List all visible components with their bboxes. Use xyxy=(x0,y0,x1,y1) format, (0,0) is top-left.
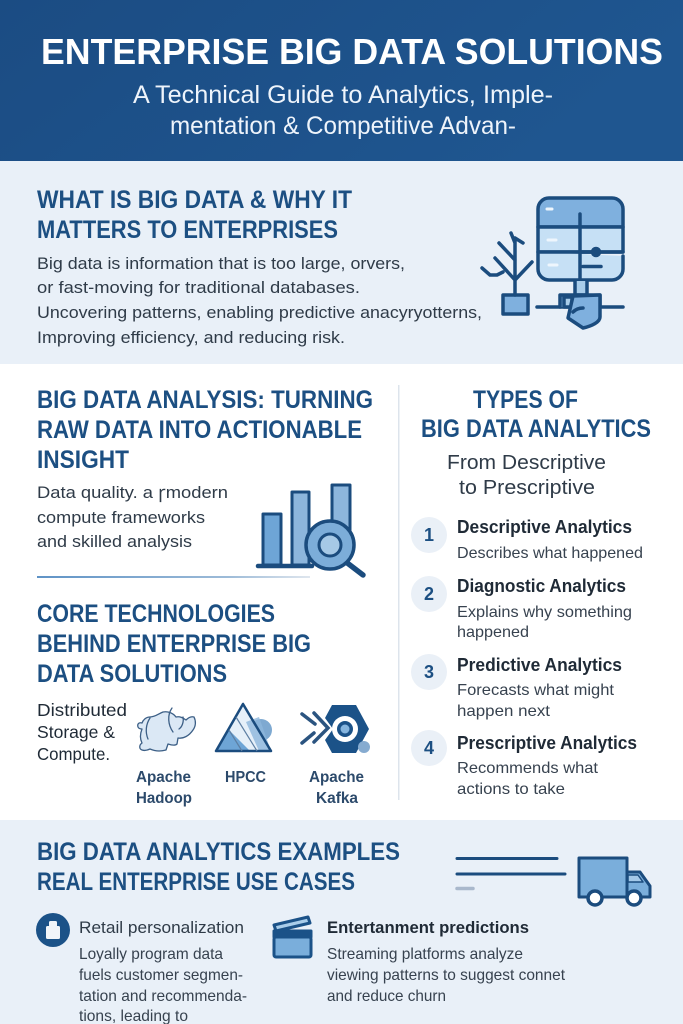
heading: core technologies: CORE TECHNOLOGIES xyxy=(37,600,275,628)
label: apache kafka: Apache xyxy=(309,769,364,786)
subtitle: mentation & Competitive Advan- xyxy=(170,112,516,140)
heading: big data analysis: INSIGHT xyxy=(37,446,129,474)
label: apache hadoop xyxy=(136,769,192,807)
use case: retail personalization: fuels customer segmen- xyxy=(79,967,243,984)
list item 1: descriptive: Descriptive Analytics xyxy=(457,517,632,537)
title: ENTERPRISE BIG DATA SOLUTIONS xyxy=(41,31,663,72)
list item 4: prescriptive xyxy=(411,730,637,798)
heading: core technologies: DATA SOLUTIONS xyxy=(37,660,227,688)
list item 3: predictive: Predictive Analytics xyxy=(457,655,622,675)
text block: storage and compute: Distributed xyxy=(37,700,127,720)
list item 2: diagnostic: Diagnostic Analytics xyxy=(457,576,626,596)
list item 2: diagnostic xyxy=(411,576,632,641)
panel: analysis and technologies xyxy=(0,364,683,820)
use case: entertainment predictions: viewing patterns to suggest connet xyxy=(327,967,566,984)
text block: analysis: and skilled analysis xyxy=(37,532,192,551)
list item 4: prescriptive: 4 xyxy=(424,738,434,758)
heading: types of analytics xyxy=(421,386,651,443)
heading: what is big data: MATTERS TO ENTERPRISES xyxy=(37,216,338,244)
icon: retail bag xyxy=(36,913,70,947)
list item 2: diagnostic: happened xyxy=(457,624,529,641)
use case: retail personalization: Retail personalization xyxy=(79,918,244,937)
subtitle xyxy=(133,81,553,140)
list item 4: prescriptive: Recommends what xyxy=(457,760,599,777)
heading: core technologies: BEHIND ENTERPRISE BIG xyxy=(37,630,311,658)
panel: what is big data xyxy=(0,161,683,364)
use case: entertainment predictions: and reduce churn xyxy=(327,988,446,1005)
label: hpcc: HPCC xyxy=(225,769,266,786)
heading: what is big data xyxy=(37,186,352,244)
text block: big data definition: Uncovering patterns, enabling predictive anacyryotterns, xyxy=(37,303,482,322)
use case: entertainment predictions: Entertanment predictions xyxy=(327,918,529,937)
text block: analysis: Data quality. a ꞅmodern xyxy=(37,483,228,503)
icon: kafka hexagon xyxy=(302,705,370,753)
icon: hpcc triangle xyxy=(216,704,272,751)
use case: retail personalization: tation and recommenda- xyxy=(79,988,247,1005)
heading: use cases xyxy=(37,838,400,896)
icon: data table with plant xyxy=(482,198,623,328)
label: apache hadoop: Apache xyxy=(136,769,191,786)
list item 3: predictive: happen next xyxy=(457,703,551,720)
use case: retail personalization xyxy=(36,913,247,1024)
subheading: descriptive to prescriptive: From Descriptive xyxy=(447,452,606,474)
list item 1: descriptive: Describes what happened xyxy=(457,545,643,562)
heading: use cases: REAL ENTERPRISE USE CASES xyxy=(37,868,355,896)
list item 4: prescriptive: Prescriptive Analytics xyxy=(457,733,637,753)
subheading: descriptive to prescriptive xyxy=(447,452,606,499)
label: apache kafka: Kafka xyxy=(316,790,358,807)
heading: big data analysis: BIG DATA ANALYSIS: TURNING xyxy=(37,386,373,414)
text block: big data definition xyxy=(37,254,482,347)
list item 1: descriptive: 1 xyxy=(424,525,434,545)
heading: types of analytics: TYPES OF xyxy=(473,386,578,414)
use case: entertainment predictions xyxy=(274,917,566,1005)
list item 3: predictive xyxy=(411,654,622,720)
use case: retail personalization: Loyally program data xyxy=(79,946,223,963)
heading: use cases: BIG DATA ANALYTICS EXAMPLES xyxy=(37,838,400,866)
icon: hadoop elephant xyxy=(138,708,195,751)
label: apache kafka xyxy=(309,769,364,807)
text block: big data definition: or fast-moving for traditional databases. xyxy=(37,278,360,297)
list item 1: descriptive xyxy=(411,517,643,562)
subheading: descriptive to prescriptive: to Prescriptive xyxy=(459,477,595,499)
use case: entertainment predictions: Streaming platforms analyze xyxy=(327,946,523,963)
icon: bar chart with magnifier xyxy=(258,485,363,575)
list item 2: diagnostic: 2 xyxy=(424,584,434,604)
text block: analysis: compute frameworks xyxy=(37,508,205,527)
list item 4: prescriptive: actions to take xyxy=(457,781,565,798)
icon: clapperboard xyxy=(274,917,311,957)
heading: big data analysis xyxy=(37,386,373,474)
heading: types of analytics: BIG DATA ANALYTICS xyxy=(421,415,651,443)
subtitle: A Technical Guide to Analytics, Imple- xyxy=(133,81,553,109)
text block: big data definition: Big data is information that is too large, orvers, xyxy=(37,254,405,273)
icon: speed lines and truck xyxy=(457,858,650,905)
text block: storage and compute: Compute. xyxy=(37,744,110,764)
label: apache hadoop: Hadoop xyxy=(136,790,192,807)
text block: storage and compute xyxy=(37,700,127,764)
panel: use cases xyxy=(0,820,683,1024)
heading: what is big data: WHAT IS BIG DATA & WHY IT xyxy=(37,186,352,214)
heading: core technologies xyxy=(37,600,311,688)
text block: analysis xyxy=(37,483,228,551)
list item 2: diagnostic: Explains why something xyxy=(457,604,632,621)
header banner xyxy=(0,0,683,161)
list item 3: predictive: 3 xyxy=(424,662,434,682)
text block: big data definition: Improving efficiency, and reducing risk. xyxy=(37,328,345,347)
text block: storage and compute: Storage & xyxy=(37,722,115,742)
list item 3: predictive: Forecasts what might xyxy=(457,682,615,699)
heading: big data analysis: RAW DATA INTO ACTIONABLE xyxy=(37,416,362,444)
